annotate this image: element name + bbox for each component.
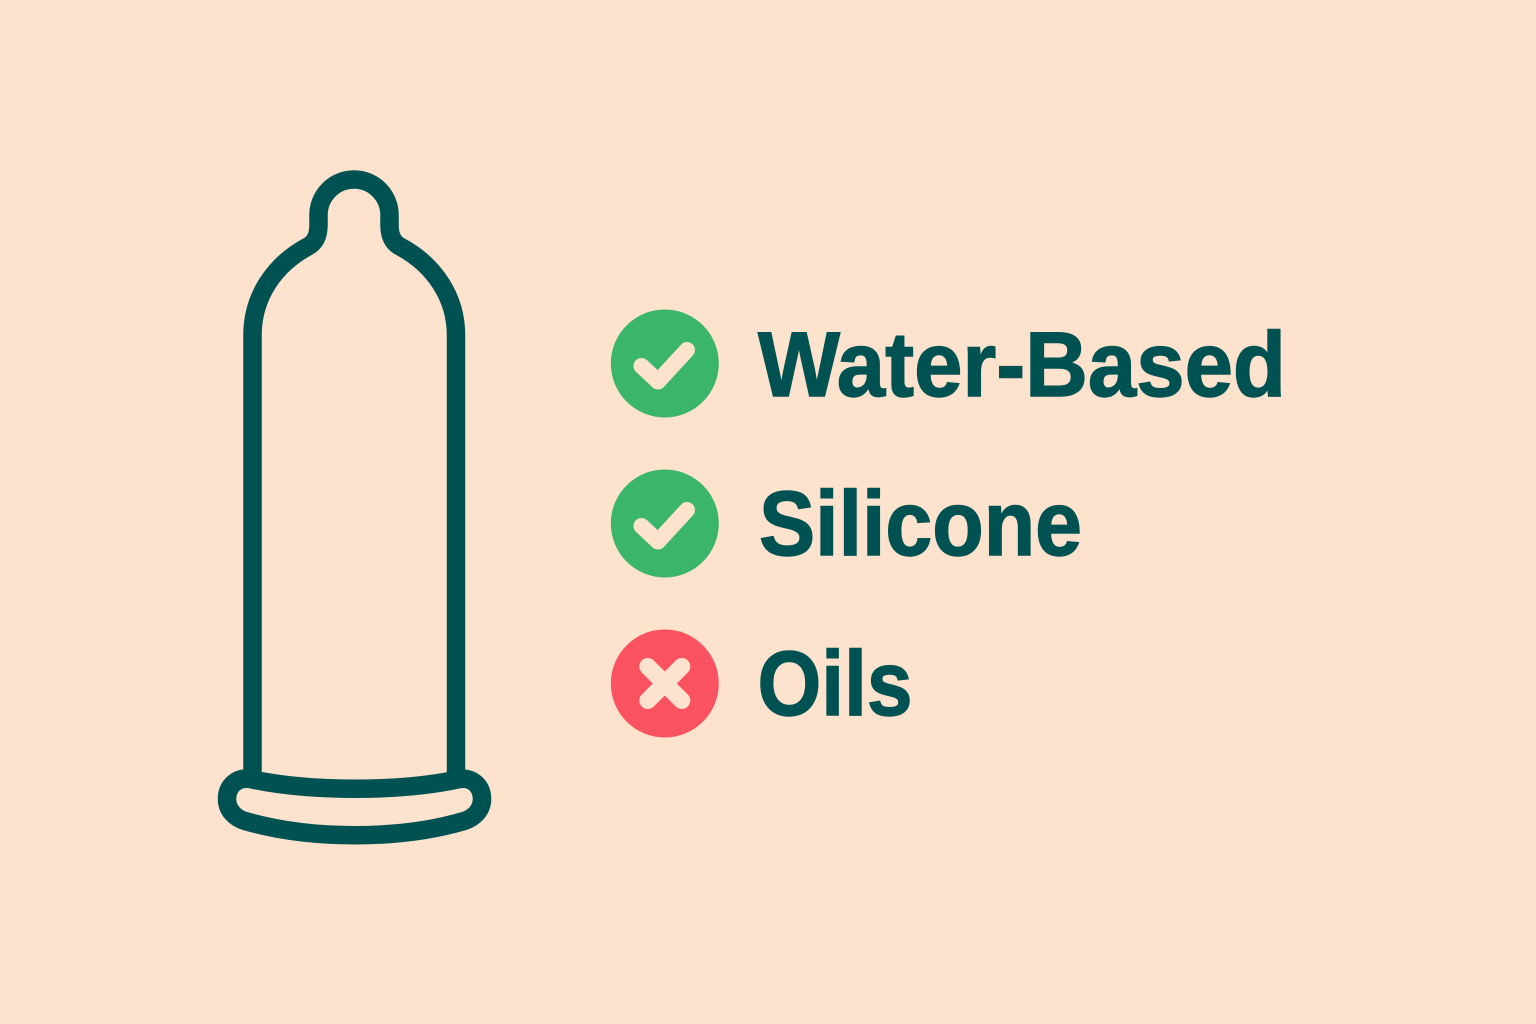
icon: oils cross [611, 630, 719, 738]
icon: silicone check [611, 470, 719, 578]
label: silicone: Silicone [759, 473, 1082, 575]
label: oils: Oils [758, 633, 912, 735]
icon: condom outline [227, 180, 482, 835]
icon: water-based check [611, 310, 719, 418]
label: water-based: Water-Based [758, 314, 1286, 416]
